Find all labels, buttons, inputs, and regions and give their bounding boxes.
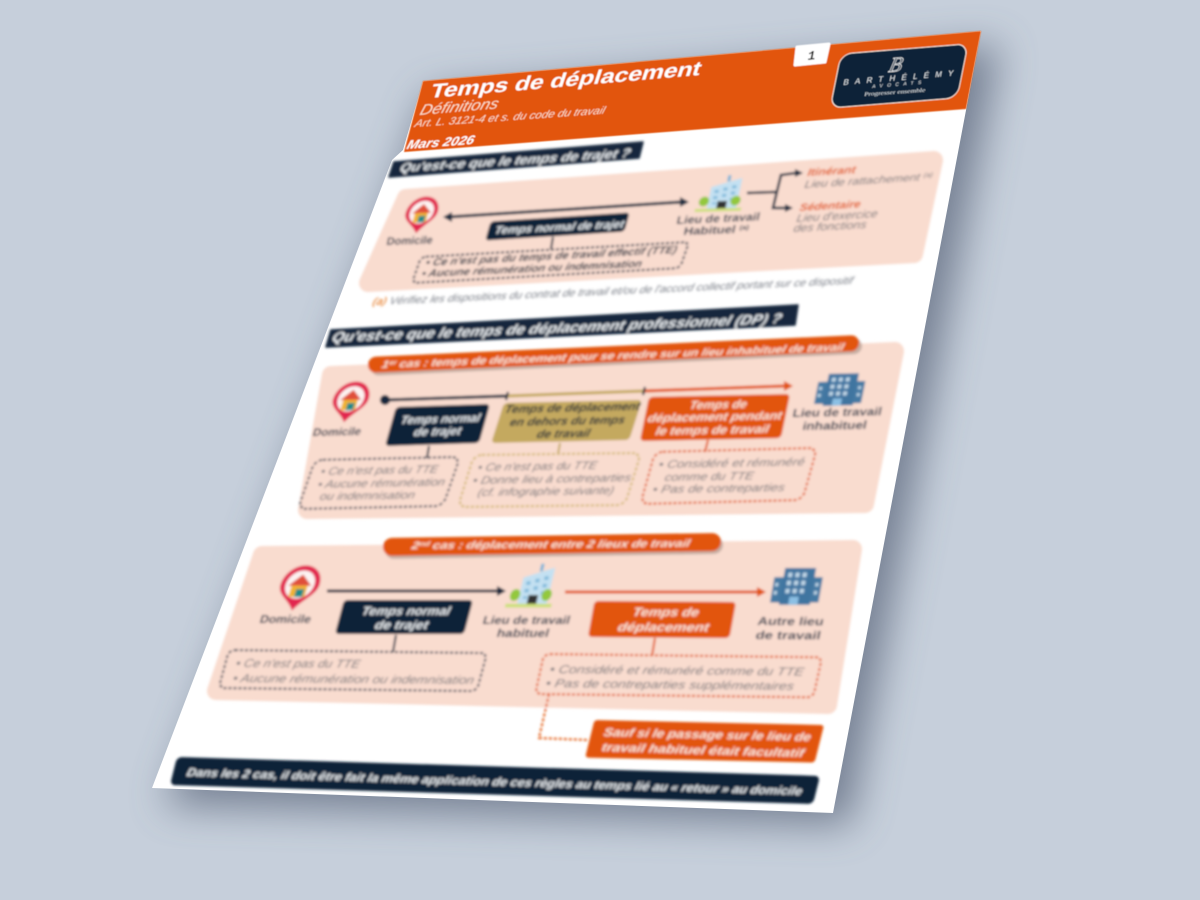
logo (830, 44, 968, 108)
text: sédentaire: Sédentaire (798, 198, 862, 214)
label: autre lieu (754, 615, 825, 642)
callout: pendant le temps de travail (640, 448, 817, 504)
box: temps de déplacement (588, 601, 736, 638)
banner: 2e cas: 2 (410, 540, 419, 552)
label: autre lieu: Autre lieu (756, 615, 825, 628)
title: Temps de déplacement (427, 58, 705, 103)
callout: hors temps de travail: • Ce n'est pas du TTE (476, 460, 599, 474)
timeline arrow (380, 381, 793, 405)
icon: light building (694, 175, 748, 212)
legal reference: Art. L. 3121-4 et s. du code du travail (412, 105, 608, 130)
callout: temps normal: • Ce n'est pas du TTE (319, 464, 440, 478)
footnote: (a) Vérifiez les dispositions du contrat de travail et/ou de l'accord collectif portant sur ce dispositif (371, 275, 856, 308)
box: pendant le temps de travail: le temps de travail (654, 423, 771, 438)
text: sédentaire: des fonctions (792, 219, 868, 235)
callout: hors temps de travail: • Donne lieu à contreparties (471, 472, 633, 487)
heading: déplacement professionnel (326, 305, 798, 347)
box: hors temps de travail: de travail (535, 427, 593, 441)
callout: temps normal (298, 457, 460, 509)
label: domicile: Domicile (258, 613, 313, 626)
box: exception (585, 720, 824, 763)
box: temps de déplacement: Temps de (631, 605, 701, 619)
callout: déplacement: • Considéré et rémunéré comme du TTE (548, 663, 806, 678)
icon: blue building (770, 568, 824, 605)
text: itinérant (803, 164, 934, 191)
box: temps normal: de trajet (373, 618, 431, 632)
box: exception: travail habituel était facultatif (600, 741, 807, 760)
callout: not effective work time (412, 242, 689, 283)
box: pendant le temps de travail: Temps de (688, 398, 749, 412)
label: lieu de travail habituel (675, 211, 761, 238)
box: pendant le temps de travail: déplacement pendant (646, 409, 785, 425)
arrow: domicile to work (327, 586, 506, 596)
callout: not effective work time: • Aucune rémunération ou indemnisation (420, 258, 644, 280)
label: lieu de travail habituel: Habituel (682, 224, 728, 238)
callout: temps normal (219, 650, 487, 691)
text: itinérant: (a) (923, 172, 934, 179)
banner: 1er cas (368, 335, 862, 376)
branch arrows (747, 169, 803, 212)
icon: home pin (272, 565, 326, 611)
connectors (393, 635, 655, 656)
box: temps normal de trajet: Temps normal de trajet (493, 219, 627, 237)
date: Mars 2026 (405, 132, 478, 152)
box: temps normal: Temps normal (399, 412, 483, 427)
panel: cas 1 (298, 335, 895, 510)
subtitle: Définitions (418, 96, 501, 119)
text: itinérant: Itinérant (806, 164, 857, 179)
icon: home pin (400, 196, 442, 234)
logo: Progresser ensemble (864, 88, 927, 98)
callout: pendant le temps de travail: • Considéré et rémunéré (657, 457, 806, 471)
callout: hors temps de travail: (cf. infographie suivante) (476, 485, 616, 499)
page shadow (165, 45, 1000, 825)
dashed connector (539, 694, 588, 740)
box: temps normal de trajet (486, 213, 629, 240)
box: temps normal: de trajet (412, 425, 464, 439)
box: exception: Sauf si le passage sur le lieu de (602, 726, 813, 744)
text: sédentaire: Lieu d'exercice (795, 208, 879, 225)
icon: blue building (814, 373, 867, 406)
callout: temps normal: • Ce n'est pas du TTE (234, 657, 362, 671)
footer bar (170, 757, 820, 804)
arrow: work to other site (565, 587, 766, 597)
box: temps de déplacement: déplacement (616, 620, 712, 634)
panel: cas 2 (216, 533, 853, 705)
logo: BARTHÉLÉMY (843, 69, 955, 87)
heading: déplacement professionnel: Qu'est-ce que le temps de déplacement professionnel (DP) ? (330, 311, 784, 346)
logo: AVOCATS (872, 80, 923, 90)
header band (404, 31, 981, 152)
callout: pendant le temps de travail: comme du TTE (663, 471, 756, 484)
callout: not effective work time: • Ce n'est pas du temps de travail effectif (TTE) (424, 244, 679, 269)
page number tab: 1 (806, 48, 817, 64)
box: temps normal (335, 600, 473, 634)
icon: home pin (326, 381, 374, 423)
text: itinérant: Lieu de rattachement (803, 173, 904, 191)
connector (551, 237, 553, 249)
double arrow (443, 197, 689, 222)
label: lieu habituel: Lieu de travail (481, 614, 572, 627)
banner: 1er cas: er (388, 360, 398, 367)
panel: temps de trajet (368, 160, 934, 283)
banner: 2e cas (383, 533, 723, 559)
box: pendant le temps de travail (640, 394, 790, 441)
label: lieu de travail habituel: Lieu de travail (675, 211, 761, 227)
box: temps normal (385, 404, 490, 446)
callout: temps normal: • Aucune rémunération ou indemnisation (231, 672, 476, 687)
banner: 1er cas: cas : temps de déplacement pour se rendre sur un lieu inhabituel de travail (394, 342, 847, 370)
label: lieu inhabituel: Lieu de travail (791, 405, 883, 420)
page number tab (795, 44, 829, 65)
callout: temps normal: ou indemnisation (318, 490, 417, 503)
banner: 2e cas: nd (419, 541, 432, 548)
heading: temps de trajet: Qu'est-ce que le temps de trajet ? (398, 145, 633, 175)
heading: temps de trajet (389, 142, 643, 177)
banner: 1er cas: 1 (380, 359, 389, 371)
label: lieu inhabituel (791, 405, 883, 433)
callout: temps normal: • Aucune rémunération (316, 477, 447, 491)
label: lieu inhabituel: inhabituel (801, 419, 868, 433)
text: sédentaire (792, 198, 879, 235)
box: hors temps de travail: en dehors du temps (508, 414, 627, 429)
callout: pendant le temps de travail: • Pas de contreparties (651, 482, 787, 496)
banner: 2e cas: cas : déplacement entre 2 lieux de travail (427, 538, 693, 552)
label: domicile: Domicile (385, 235, 434, 248)
label: domicile: Domicile (311, 426, 363, 439)
callout: déplacement: • Pas de contreparties supplémentaires (544, 677, 796, 693)
label: lieu de travail habituel: (a) (739, 224, 750, 232)
callout: hors temps de travail (458, 453, 641, 507)
label: lieu habituel: habituel (495, 627, 551, 640)
label: autre lieu: de travail (754, 629, 822, 642)
callout: déplacement (535, 654, 822, 697)
logo: B (887, 52, 905, 77)
box: hors temps de travail (491, 400, 643, 443)
box: hors temps de travail: Temps de déplacement (503, 400, 643, 416)
label: lieu habituel (481, 614, 572, 640)
connectors (427, 440, 708, 458)
box: temps normal: Temps normal (360, 604, 453, 618)
icon: light building (505, 564, 561, 608)
footer bar: Dans les 2 cas, il doit être fait la même application de ces règles au temps lié au « retour » au domicile (185, 766, 804, 798)
page sheet (152, 31, 981, 813)
page content (170, 142, 934, 804)
